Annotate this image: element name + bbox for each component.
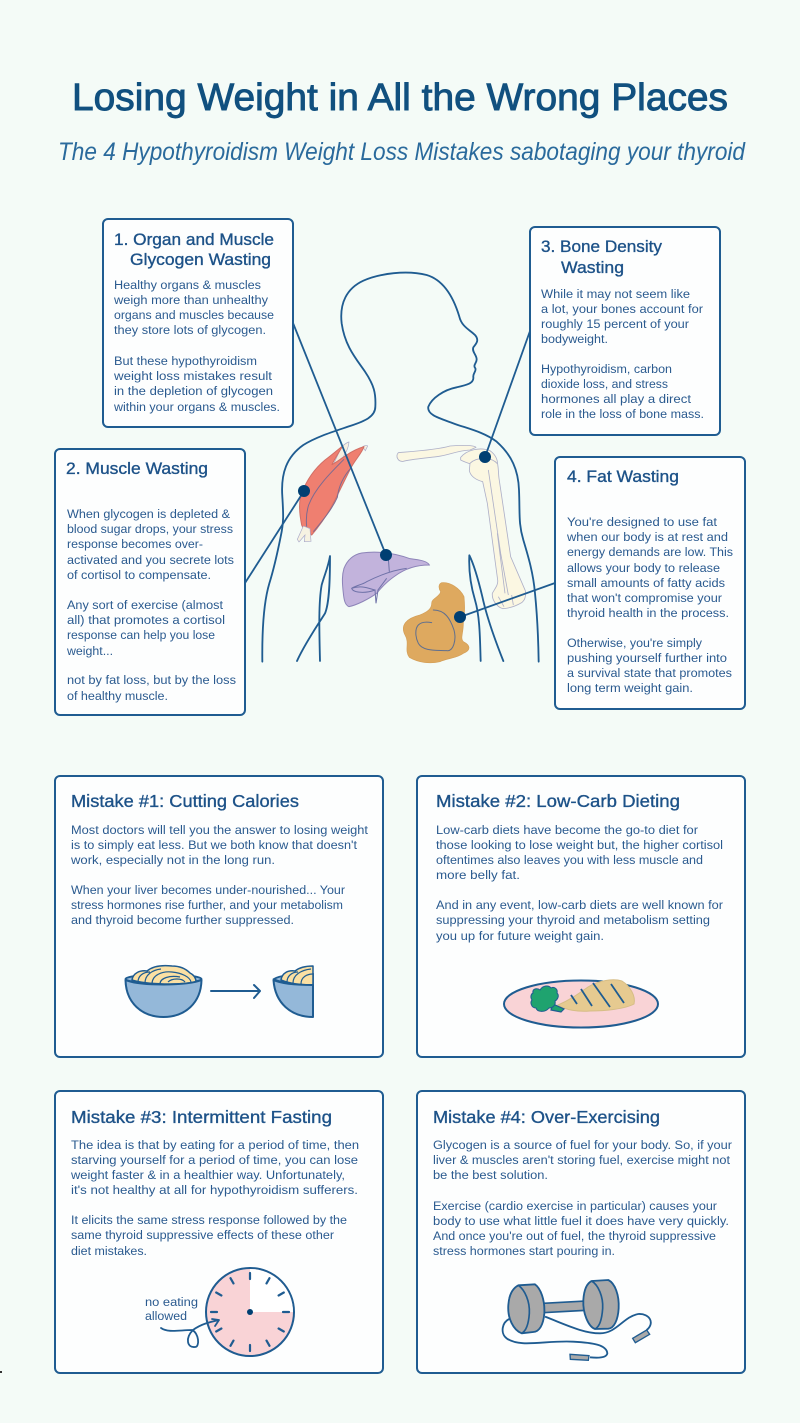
panel: muscle wasting: response can help you lose bbox=[67, 628, 215, 642]
panel: mistake 1 cutting calories: and thyroid become further suppressed. bbox=[71, 913, 294, 927]
illustration: arm bone bbox=[397, 445, 526, 609]
panel: mistake 3 intermittent fasting: weight faster & in a healthier way. Unfortunately, bbox=[70, 1168, 345, 1182]
panel: mistake 1 cutting calories: work, especially not in the long run. bbox=[70, 853, 275, 867]
panel: muscle wasting: activated and you secrete lots bbox=[67, 553, 234, 567]
marker dots bbox=[298, 451, 491, 623]
panel: mistake 1 cutting calories: is to simply eat less. But we both know that doesn't bbox=[71, 838, 358, 852]
panel: fat wasting: thyroid health in the process. bbox=[567, 606, 729, 620]
panel: mistake 3 intermittent fasting: same thyroid suppressive effects of these other bbox=[71, 1228, 334, 1242]
panel: organ and muscle glycogen wasting: organs and muscles because bbox=[114, 308, 274, 322]
panel: fat wasting: 4. Fat Wasting bbox=[567, 467, 679, 486]
panel: mistake 2 low-carb dieting: suppressing your thyroid and metabolism setting bbox=[436, 913, 710, 927]
panel: fat wasting: You're designed to use fat bbox=[567, 515, 718, 529]
panel: muscle wasting: weight... bbox=[66, 644, 113, 658]
title: Losing Weight in All the Wrong Places bbox=[72, 77, 728, 119]
panel: mistake 4 over-exercising: Glycogen is a source of fuel for your body. So, if your bbox=[433, 1138, 732, 1152]
panel: fat wasting: that won't compromise your bbox=[567, 591, 722, 605]
panel: organ and muscle glycogen wasting: weight loss mistakes result bbox=[113, 369, 273, 383]
panel: mistake 4 over-exercising: liver & muscles aren't storing fuel, exercise might not bbox=[433, 1153, 731, 1167]
icon: dumbbell and jump rope bbox=[503, 1280, 651, 1360]
panel: mistake 2 low-carb dieting: oftentimes also leaves you with less muscle and bbox=[436, 853, 703, 867]
panel: fat wasting: a survival state that promotes bbox=[567, 666, 732, 680]
panel: mistake 4 over-exercising: body to use what little fuel it does have very quickly. bbox=[433, 1214, 729, 1228]
panel: mistake 4 over-exercising bbox=[417, 1091, 745, 1373]
panel: organ and muscle glycogen wasting: within your organs & muscles. bbox=[113, 400, 280, 414]
panel: mistake 4 over-exercising: Mistake #4: Over-Exercising bbox=[433, 1107, 660, 1127]
panel: bone density wasting: While it may not seem like bbox=[541, 287, 690, 301]
panel: bone density wasting: a lot, your bones account for bbox=[541, 302, 703, 316]
panel: fat wasting: energy demands are low. This bbox=[567, 545, 733, 559]
panel: mistake 4 over-exercising: be the best solution. bbox=[433, 1168, 548, 1182]
small stray mark bbox=[0, 1371, 2, 1373]
panel: bone density wasting bbox=[530, 227, 720, 435]
panel: organ and muscle glycogen wasting: they store lots of glycogen. bbox=[114, 323, 266, 337]
panel: mistake 2 low-carb dieting: you up for future weight gain. bbox=[436, 929, 604, 943]
panel: organ and muscle glycogen wasting: in the depletion of glycogen bbox=[114, 384, 273, 398]
panel: bone density wasting: 3. Bone Density bbox=[541, 237, 663, 256]
panel: organ and muscle glycogen wasting bbox=[103, 219, 293, 427]
body diagram bbox=[262, 273, 539, 663]
panel: mistake 1 cutting calories bbox=[55, 776, 383, 1057]
panel: bone density wasting: bodyweight. bbox=[541, 332, 608, 346]
icon: full bowl of noodles bbox=[126, 966, 202, 1017]
panel: fat wasting: small amounts of fatty acids bbox=[567, 576, 725, 590]
illustration: fat bbox=[403, 583, 469, 663]
panel: muscle wasting: 2. Muscle Wasting bbox=[66, 459, 208, 478]
panel: bone density wasting: roughly 15 percent of your bbox=[541, 317, 689, 331]
panel: mistake 2 low-carb dieting bbox=[417, 776, 745, 1057]
label: no eating allowed: allowed bbox=[145, 1309, 187, 1323]
connector line: fat callout to fat bbox=[460, 583, 555, 617]
panel: fat wasting: when our body is at rest and bbox=[566, 530, 728, 544]
panel: bone density wasting: hormones all play a direct bbox=[541, 392, 692, 406]
panel: fat wasting: pushing yourself further into bbox=[567, 651, 727, 665]
panel: muscle wasting: of cortisol to compensate. bbox=[67, 568, 211, 582]
panel: bone density wasting: dioxide loss, and stress bbox=[541, 377, 668, 391]
panel: mistake 2 low-carb dieting: those looking to lose weight but, the higher cortisol bbox=[436, 838, 723, 852]
panel: muscle wasting: When glycogen is depleted & bbox=[67, 507, 230, 521]
panel: muscle wasting: Any sort of exercise (almost bbox=[67, 598, 224, 612]
panel: fat wasting bbox=[555, 457, 745, 709]
panel: organ and muscle glycogen wasting: Healthy organs & muscles bbox=[114, 278, 261, 292]
panel: muscle wasting: response becomes over- bbox=[67, 537, 203, 551]
body outline bbox=[262, 273, 539, 662]
connector line: muscle callout to muscle bbox=[245, 491, 304, 583]
panel: mistake 3 intermittent fasting: it's not healthy at all for hypothyroidism sufferers. bbox=[71, 1183, 358, 1197]
panel: fat wasting: Otherwise, you're simply bbox=[567, 636, 703, 650]
panel: mistake 1 cutting calories: When your liver becomes under-nourished... Your bbox=[71, 883, 345, 897]
illustration: liver bbox=[342, 552, 429, 607]
panel: muscle wasting: all) that promotes a cortisol bbox=[67, 613, 225, 627]
panel: organ and muscle glycogen wasting: Glycogen Wasting bbox=[130, 250, 271, 269]
label: no eating allowed: no eating bbox=[145, 1295, 198, 1309]
panel: mistake 1 cutting calories: Mistake #1: Cutting Calories bbox=[71, 791, 299, 811]
illustration: muscle bbox=[297, 442, 368, 542]
panel: mistake 2 low-carb dieting: Mistake #2: Low-Carb Dieting bbox=[436, 791, 680, 811]
icon: clock bbox=[206, 1268, 294, 1356]
panel: organ and muscle glycogen wasting: 1. Organ and Muscle bbox=[114, 230, 274, 249]
panel: organ and muscle glycogen wasting: But these hypothyroidism bbox=[114, 354, 257, 368]
panel: mistake 3 intermittent fasting: The idea is that by eating for a period of time, then bbox=[71, 1138, 359, 1152]
panel: bone density wasting: role in the loss of bone mass. bbox=[541, 407, 704, 421]
arrow: squiggle to clock bbox=[161, 1319, 219, 1347]
panel: mistake 1 cutting calories: stress hormones rise further, and your metabolism bbox=[71, 898, 343, 912]
panel: muscle wasting: not by fat loss, but by the loss bbox=[67, 673, 236, 687]
connector line: glycogen callout to liver bbox=[293, 323, 386, 555]
panel: organ and muscle glycogen wasting: weigh more than unhealthy bbox=[113, 293, 269, 307]
panel: mistake 2 low-carb dieting: Low-carb diets have become the go-to diet for bbox=[436, 823, 698, 837]
panel: mistake 3 intermittent fasting: diet mistakes. bbox=[71, 1244, 147, 1258]
subtitle: The 4 Hypothyroidism Weight Loss Mistakes sabotaging your thyroid bbox=[58, 138, 746, 166]
panel: mistake 3 intermittent fasting bbox=[55, 1091, 383, 1373]
panel: muscle wasting: of healthy muscle. bbox=[67, 689, 168, 703]
panel: mistake 4 over-exercising: stress hormones start pouring in. bbox=[433, 1244, 615, 1258]
panel: mistake 2 low-carb dieting: And in any event, low-carb diets are well known for bbox=[436, 898, 723, 912]
panel: bone density wasting: Wasting bbox=[561, 258, 624, 277]
panel: fat wasting: allows your body to release bbox=[567, 561, 720, 575]
label: no eating allowed bbox=[145, 1295, 198, 1323]
panel: muscle wasting bbox=[55, 449, 245, 715]
panel: mistake 4 over-exercising: And once you're out of fuel, the thyroid suppressive bbox=[433, 1229, 716, 1243]
icon: plate with chicken and broccoli bbox=[504, 980, 658, 1028]
panel: mistake 3 intermittent fasting: It elicits the same stress response followed by the bbox=[71, 1213, 347, 1227]
arrow bbox=[211, 985, 260, 998]
icon: half bowl of noodles bbox=[274, 966, 313, 1017]
panel: mistake 4 over-exercising: Exercise (cardio exercise in particular) causes your bbox=[433, 1199, 717, 1213]
panel: mistake 1 cutting calories: Most doctors will tell you the answer to losing weight bbox=[71, 823, 369, 837]
panel: mistake 3 intermittent fasting: Mistake #3: Intermittent Fasting bbox=[71, 1107, 332, 1127]
panel: mistake 2 low-carb dieting: more belly fat. bbox=[436, 868, 520, 882]
connector line: bone callout to bone bbox=[485, 331, 530, 457]
panel: mistake 3 intermittent fasting: starving yourself for a period of time, you can lose bbox=[71, 1153, 358, 1167]
panel: fat wasting: long term weight gain. bbox=[567, 681, 693, 695]
panel: muscle wasting: blood sugar drops, your stress bbox=[67, 522, 233, 536]
panel: bone density wasting: Hypothyroidism, carbon bbox=[541, 362, 672, 376]
